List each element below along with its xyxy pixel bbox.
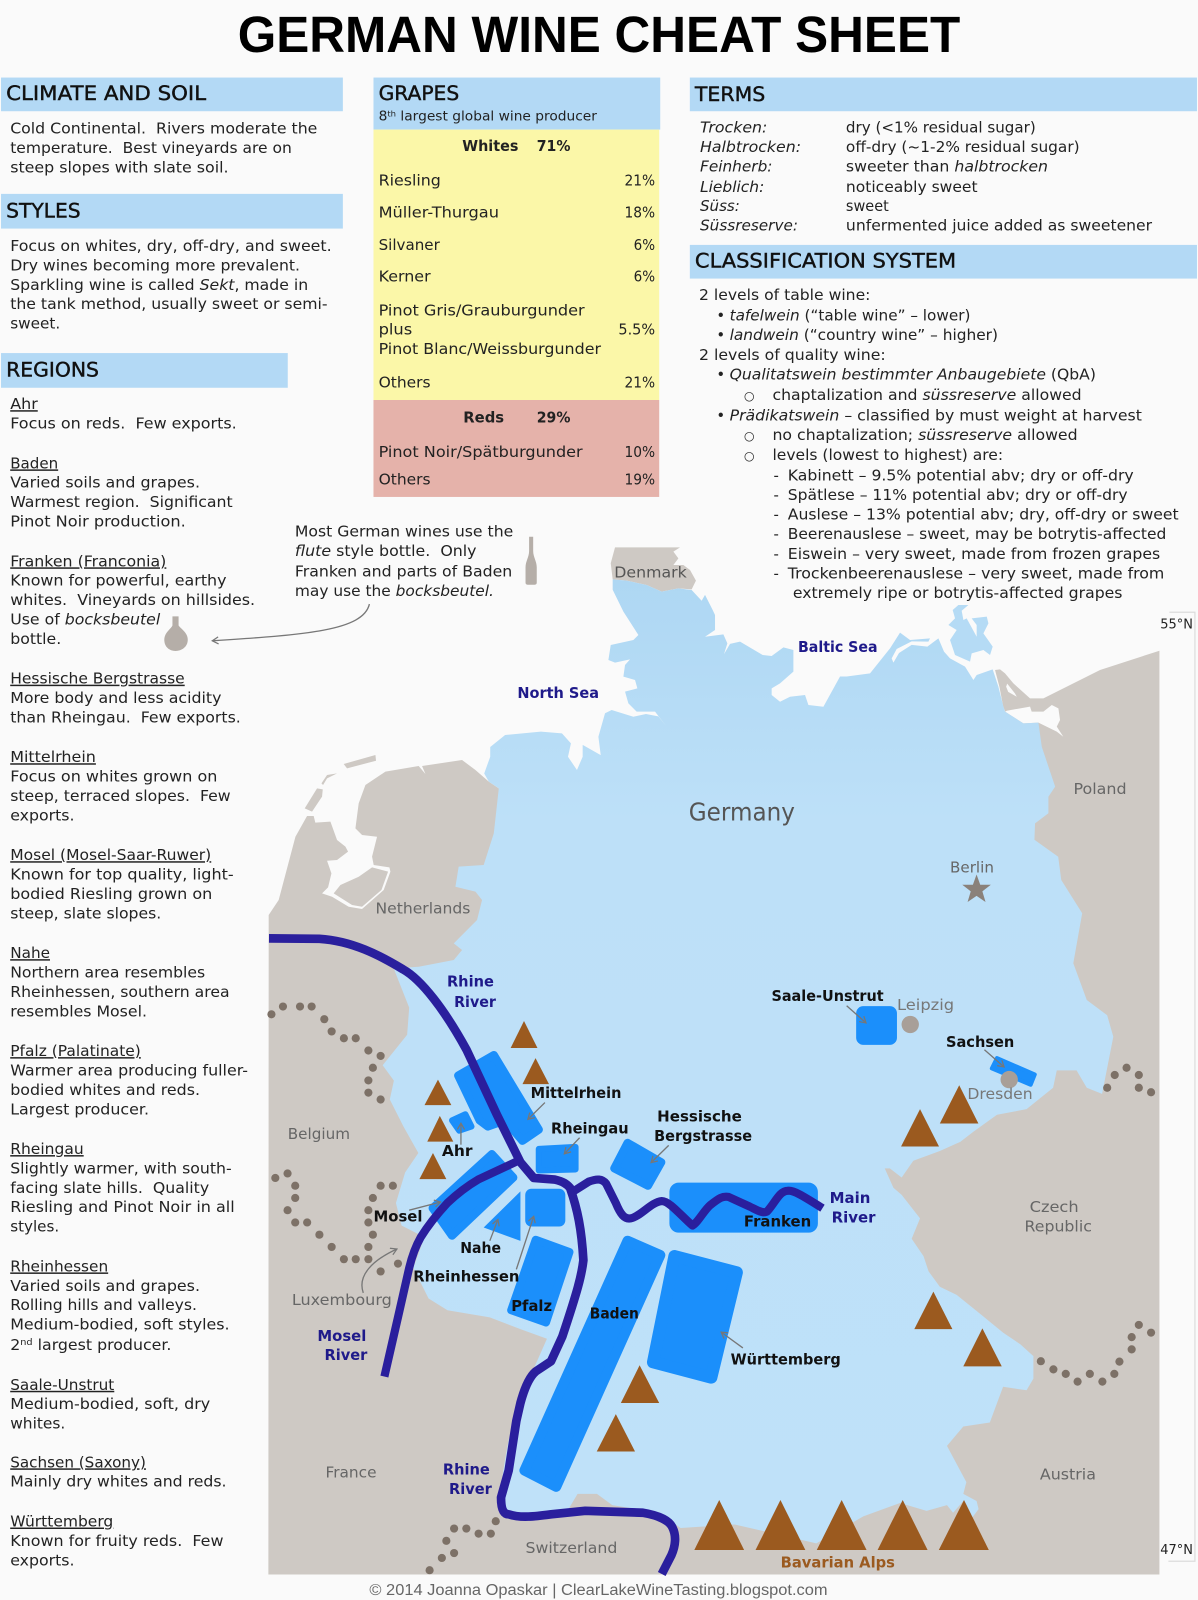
panel: regions: steep, slate slopes. xyxy=(10,904,161,922)
country and city labels: Luxembourg xyxy=(292,1291,392,1309)
water: Szczecin lagoon xyxy=(1005,705,1063,737)
panel: grapes: 5.5% xyxy=(618,321,655,339)
panel: terms: Trocken: xyxy=(700,119,767,137)
panel: styles xyxy=(1,194,343,333)
panel: climate and soil: temperature. Best vineyards are on xyxy=(10,139,292,157)
panel: classification system: 2 levels of quality wine: xyxy=(699,346,886,364)
wine region: Hessische Bergstrasse xyxy=(614,1143,661,1186)
panel: regions: Mittelrhein xyxy=(10,748,96,766)
panel: classification system: Prädikatswein – classified by must weight at harvest xyxy=(730,406,1142,424)
panel: regions: largest producer. xyxy=(33,1336,171,1354)
sea and river labels: River xyxy=(449,1480,492,1498)
panel: classification system: extremely ripe or botrytis-affected grapes xyxy=(793,584,1123,602)
wine region labels: Mosel xyxy=(373,1207,422,1225)
panel: terms: TERMS xyxy=(694,83,765,106)
panel: grapes: largest global wine producer xyxy=(396,109,598,124)
panel: terms: off-dry (~1-2% residual sugar) xyxy=(846,138,1080,156)
sea and river labels: River xyxy=(832,1208,876,1226)
panel: classification system: Eiswein – very sweet, made from frozen grapes xyxy=(788,545,1160,563)
land: Denmark xyxy=(611,547,696,592)
city markers: Leipzig and Dresden xyxy=(902,1016,1018,1088)
country and city labels: Czech xyxy=(1030,1198,1079,1216)
panel: classification system: ○ xyxy=(744,389,755,403)
panel: classification system: landwein (“country wine” – higher) xyxy=(730,326,998,344)
panel: regions: whites. xyxy=(10,1415,65,1433)
panel: grapes: 21% xyxy=(625,374,655,392)
country and city labels: France xyxy=(326,1464,377,1482)
panel: styles: Focus on whites, dry, off-dry, and sweet. xyxy=(10,237,332,255)
callout: bottle note: may use the bocksbeutel. xyxy=(295,582,494,600)
wine region: Pfalz xyxy=(511,1240,569,1322)
country and city labels xyxy=(288,564,1127,1557)
country borders (dotted) xyxy=(267,1002,1155,1574)
panel: climate and soil: steep slopes with slate soil. xyxy=(10,158,229,176)
panel: terms: dry (<1% residual sugar) xyxy=(846,119,1036,137)
wine region: Württemberg xyxy=(653,1256,737,1378)
panel: regions: Hessische Bergstrasse xyxy=(10,670,185,688)
panel: climate and soil xyxy=(1,78,343,176)
panel: terms xyxy=(690,78,1197,235)
island: Rügen xyxy=(948,605,993,662)
country and city labels: Netherlands xyxy=(376,899,470,917)
panel: terms: Süss: xyxy=(700,197,740,215)
panel: grapes: 6% xyxy=(634,268,655,286)
panel: classification system: • xyxy=(716,326,725,344)
panel: classification system xyxy=(690,245,1197,602)
wine region: Rheingau xyxy=(539,1147,576,1170)
panel: regions: Focus on reds. Few exports. xyxy=(10,415,237,433)
panel: grapes: Kerner xyxy=(379,268,432,286)
panel: regions: Sachsen (Saxony) xyxy=(10,1453,146,1471)
land: neighbouring countries xyxy=(268,651,1159,1574)
Rhine River xyxy=(269,938,675,1574)
panel: terms: noticeably sweet xyxy=(846,178,978,196)
panel: classification system: - xyxy=(773,525,779,543)
country and city labels: Poland xyxy=(1074,780,1127,798)
panel: regions: Known for powerful, earthy xyxy=(10,572,227,590)
wine region labels: Mittelrhein xyxy=(531,1084,621,1102)
panel: regions: Rheinhessen, southern area xyxy=(10,983,230,1001)
latitude frame: 55°N xyxy=(1160,618,1193,633)
panel: classification system: levels (lowest to highest) are: xyxy=(772,446,1003,464)
sea and river labels: River xyxy=(454,993,496,1011)
panel: grapes: GRAPES xyxy=(379,82,459,105)
country and city labels: Switzerland xyxy=(526,1539,617,1557)
wine region labels: Bergstrasse xyxy=(654,1127,752,1145)
wine region labels xyxy=(373,987,1014,1368)
panel: grapes: 8 xyxy=(379,109,387,124)
panel: classification system: ○ xyxy=(744,429,755,443)
panel: regions: Warmer area producing fuller- xyxy=(10,1062,248,1080)
wine region: Mittelrhein xyxy=(458,1055,539,1141)
Mosel River xyxy=(384,1161,518,1377)
panel: classification system: no chaptalization; süssreserve allowed xyxy=(772,426,1078,444)
wine region: Franken xyxy=(669,1183,818,1233)
panel: grapes: 71% xyxy=(537,137,571,155)
country and city labels: Leipzig xyxy=(897,996,954,1014)
sea and river labels: River xyxy=(325,1346,368,1364)
wine region labels: Nahe xyxy=(460,1239,501,1257)
panel: regions: Use of bocksbeutel xyxy=(10,610,161,628)
wine region labels: Württemberg xyxy=(731,1350,841,1368)
Bavarian Alps label: Bavarian Alps xyxy=(781,1553,895,1571)
panel: regions: Warmest region. Significant xyxy=(10,493,233,511)
mountains xyxy=(419,1021,1002,1550)
panel: grapes: Reds xyxy=(463,408,504,426)
panel: grapes: Whites xyxy=(462,137,519,155)
panel: classification system: - xyxy=(773,486,779,504)
panel: grapes: Others xyxy=(379,374,431,392)
panel: regions: resembles Mosel. xyxy=(10,1002,147,1020)
panel: climate and soil: Cold Continental. Rivers moderate the xyxy=(10,120,317,138)
panel: regions: Focus on whites grown on xyxy=(10,768,217,786)
panel: grapes: 6% xyxy=(634,236,655,254)
panel: styles: sweet. xyxy=(10,315,60,333)
panel: terms: unfermented juice added as sweetener xyxy=(846,217,1153,235)
callout: bottle note xyxy=(295,523,513,600)
land: Flevoland xyxy=(334,867,388,907)
panel: regions: than Rheingau. Few exports. xyxy=(10,708,241,726)
country and city labels: Belgium xyxy=(288,1125,350,1143)
panel: classification system: - xyxy=(773,505,779,523)
wine region labels: Rheinhessen xyxy=(413,1268,519,1286)
panel: regions: bodied Riesling grown on xyxy=(10,885,212,903)
panel: styles: the tank method, usually sweet or semi- xyxy=(10,295,328,313)
panel: classification system: Beerenauslese – sweet, may be botrytis-affected xyxy=(788,525,1166,543)
panel: classification system: Auslese – 13% potential abv; dry, off-dry or sweet xyxy=(788,505,1179,523)
panel: classification system: - xyxy=(773,467,779,485)
latitude frame: 47°N xyxy=(1160,1543,1193,1558)
panel: regions: Saale-Unstrut xyxy=(10,1376,114,1394)
wine region labels: Saale-Unstrut xyxy=(771,987,884,1005)
panel: classification system: 2 levels of table wine: xyxy=(699,286,870,304)
Main River xyxy=(573,1180,822,1226)
sea and river labels: Baltic Sea xyxy=(798,638,878,656)
wine region: Baden xyxy=(525,1241,660,1487)
wine region: Saale-Unstrut xyxy=(856,1006,897,1045)
panel: styles: STYLES xyxy=(6,199,81,222)
wine region labels: Ahr xyxy=(442,1142,473,1160)
panel: grapes: Müller-Thurgau xyxy=(379,203,499,221)
panel: classification system: Kabinett – 9.5% potential abv; dry or off-dry xyxy=(788,467,1134,485)
panel: classification system: chaptalization and süssreserve allowed xyxy=(772,386,1082,404)
wine region labels: Sachsen xyxy=(946,1033,1014,1051)
wine region labels: Baden xyxy=(590,1304,639,1322)
panel: grapes: Silvaner xyxy=(379,236,441,254)
panel: terms: Feinherb: xyxy=(700,157,772,175)
icon: flute bottle xyxy=(526,537,537,585)
panel: grapes: Pinot Blanc/Weissburgunder xyxy=(379,340,602,358)
panel: regions: Varied soils and grapes. xyxy=(10,474,200,492)
panel: regions: exports. xyxy=(10,806,74,824)
sea and river labels xyxy=(317,638,878,1498)
panel: regions: Rheingau xyxy=(10,1140,84,1158)
panel: grapes: 21% xyxy=(625,172,655,190)
panel: regions: facing slate hills. Quality xyxy=(10,1179,209,1197)
wine region labels: Hessische xyxy=(657,1107,742,1125)
panel: classification system: Spätlese – 11% potential abv; dry or off-dry xyxy=(788,486,1128,504)
panel: grapes: 18% xyxy=(625,203,655,221)
panel: regions: Medium-bodied, soft, dry xyxy=(10,1395,210,1413)
country and city labels: Berlin xyxy=(950,858,994,876)
panel: regions: Nahe xyxy=(10,944,50,962)
panel: classification system: - xyxy=(773,565,779,583)
panel: regions: Pfalz (Palatinate) xyxy=(10,1042,141,1060)
icon: Berlin star xyxy=(962,874,991,902)
panel: classification system: - xyxy=(773,545,779,563)
panel: regions: bodied whites and reds. xyxy=(10,1081,200,1099)
panel: grapes: 10% xyxy=(625,443,655,461)
panel: grapes: plus xyxy=(379,321,413,339)
callout: bottle note: Franken and parts of Baden xyxy=(295,563,512,581)
sea and river labels: Rhine xyxy=(443,1460,490,1478)
footer credit: © 2014 Joanna Opaskar | ClearLakeWineTasting.blogspot.com xyxy=(369,1582,828,1599)
panel: regions: steep, terraced slopes. Few xyxy=(10,787,231,805)
map: Germany and neighbours xyxy=(267,547,1159,1574)
wine region: Rheinhessen xyxy=(525,1189,565,1227)
panel: classification system: ○ xyxy=(744,449,755,463)
panel: grapes: Pinot Noir/Spätburgunder xyxy=(379,443,584,461)
panel: regions: Riesling and Pinot Noir in all xyxy=(10,1198,235,1216)
panel: classification system: tafelwein (“table wine” – lower) xyxy=(730,306,970,324)
land: Wadden islands xyxy=(305,755,376,812)
panel: regions: nd xyxy=(20,1337,33,1348)
panel: regions: Varied soils and grapes. xyxy=(10,1277,200,1295)
panel: classification system: • xyxy=(716,406,725,424)
callout: bottle note: Most German wines use the xyxy=(295,523,513,541)
Germany label: Germany xyxy=(689,797,795,826)
panel: regions: Mainly dry whites and reds. xyxy=(10,1473,227,1491)
wine region: Mosel xyxy=(433,1154,513,1236)
arrow: callout to bocksbeutel xyxy=(212,604,369,641)
sea and river labels: Mosel xyxy=(317,1327,366,1345)
wine region: Sachsen xyxy=(992,1058,1035,1085)
panel: regions: Known for fruity reds. Few xyxy=(10,1532,223,1550)
icon: bocksbeutel bottle xyxy=(164,616,188,651)
panel: regions: Pinot Noir production. xyxy=(10,513,186,531)
sea and river labels: North Sea xyxy=(517,684,599,702)
panel: terms: sweeter than halbtrocken xyxy=(846,157,1048,175)
wine region: Ahr xyxy=(452,1114,471,1131)
panel: grapes: 19% xyxy=(625,471,655,489)
leader arrows xyxy=(362,1006,1004,1348)
panel: classification system: • xyxy=(716,306,725,324)
panel: regions: Known for top quality, light- xyxy=(10,866,234,884)
panel: climate and soil: CLIMATE AND SOIL xyxy=(6,82,206,105)
panel: regions: exports. xyxy=(10,1551,74,1569)
panel: grapes: Others xyxy=(379,471,431,489)
panel: regions: Northern area resembles xyxy=(10,964,205,982)
panel: regions: bottle. xyxy=(10,630,61,648)
panel: regions: Württemberg xyxy=(10,1513,113,1531)
panel: classification system: Trockenbeerenauslese – very sweet, made from xyxy=(787,565,1164,583)
panel: grapes: Riesling xyxy=(379,172,441,190)
sea and river labels: Main xyxy=(830,1189,870,1207)
panel: regions: More body and less acidity xyxy=(10,689,222,707)
panel: regions: Slightly warmer, with south- xyxy=(10,1159,232,1177)
callout: bottle note: flute style bottle. Only xyxy=(295,542,477,560)
panel: regions: Medium-bodied, soft styles. xyxy=(10,1316,230,1334)
panel: terms: Halbtrocken: xyxy=(700,138,801,156)
panel: styles: Dry wines becoming more prevalent. xyxy=(10,256,300,274)
panel: regions: Franken (Franconia) xyxy=(10,552,166,570)
panel: terms: Süssreserve: xyxy=(700,217,798,235)
panel: classification system: Qualitatswein bestimmter Anbaugebiete (QbA) xyxy=(730,366,1096,384)
wine region labels: Pfalz xyxy=(511,1297,552,1315)
panel: grapes xyxy=(373,78,660,497)
panel: regions: REGIONS xyxy=(6,359,99,382)
panel: regions: styles. xyxy=(10,1218,59,1236)
panel: regions: Rheinhessen xyxy=(10,1257,108,1275)
country and city labels: Austria xyxy=(1040,1466,1096,1484)
panel: grapes: th xyxy=(387,108,396,118)
country and city labels: Denmark xyxy=(614,564,687,582)
wine region labels: Franken xyxy=(744,1213,811,1231)
panel: terms: sweet xyxy=(846,197,889,215)
wine region: Nahe xyxy=(484,1191,520,1241)
panel: styles: Sparkling wine is called Sekt, made in xyxy=(10,276,308,294)
panel: regions: Rolling hills and valleys. xyxy=(10,1296,197,1314)
panel: regions xyxy=(1,353,288,1569)
panel: classification system: CLASSIFICATION SYSTEM xyxy=(695,249,956,272)
panel: grapes: 29% xyxy=(537,408,571,426)
panel: classification system: • xyxy=(716,366,725,384)
panel: grapes: Pinot Gris/Grauburgunder xyxy=(379,301,586,319)
panel: regions: Ahr xyxy=(10,395,39,413)
wine region labels: Rheingau xyxy=(551,1120,629,1138)
panel: regions: Largest producer. xyxy=(10,1100,149,1118)
panel: regions: whites. Vineyards on hillsides. xyxy=(10,591,255,609)
panel: regions: Baden xyxy=(10,454,58,472)
Germany xyxy=(383,579,1113,1543)
country and city labels: Republic xyxy=(1025,1218,1092,1236)
latitude frame xyxy=(1160,612,1195,1561)
panel: regions: Mosel (Mosel-Saar-Ruwer) xyxy=(10,846,211,864)
panel: terms: Lieblich: xyxy=(700,178,764,196)
country and city labels: Dresden xyxy=(967,1085,1033,1103)
sea and river labels: Rhine xyxy=(447,973,494,991)
title: GERMAN WINE CHEAT SHEET xyxy=(238,6,960,63)
panel: regions: 2 xyxy=(10,1336,20,1354)
